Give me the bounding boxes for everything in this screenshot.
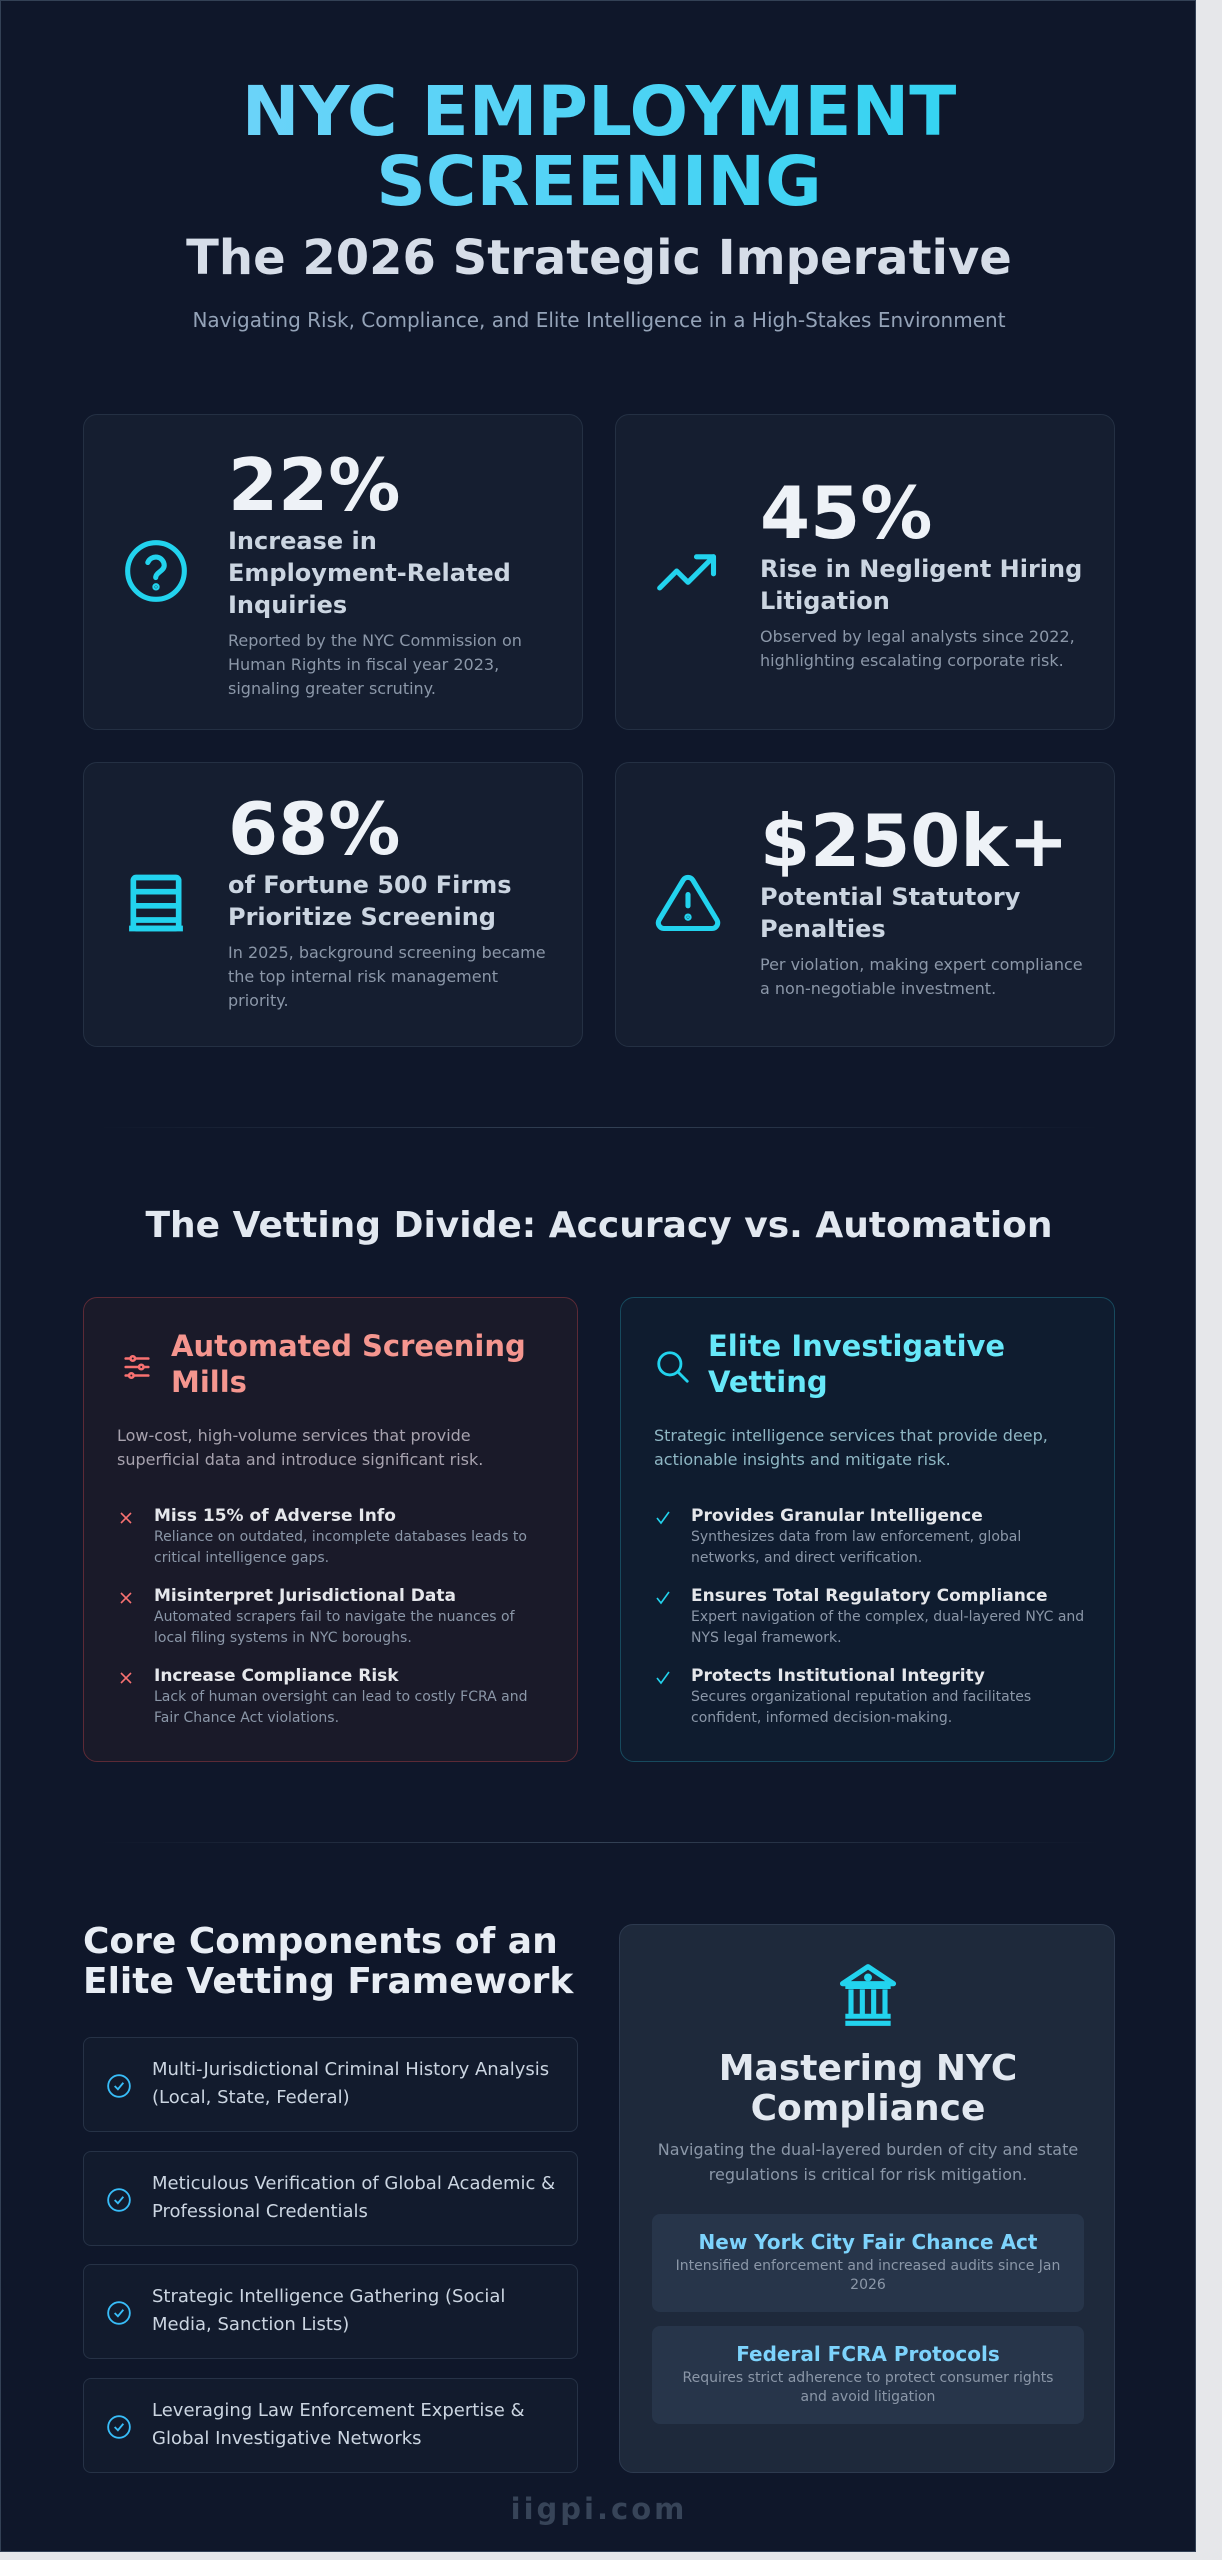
stat card: 22%: 22%: [228, 443, 400, 527]
description: regulations is critical for risk mitigation.: [709, 2165, 1027, 2184]
icon: warning: [656, 874, 720, 931]
stat card: $250k+: Penalties: [760, 915, 886, 943]
heading: Vetting: [708, 1365, 828, 1399]
icon: trend up: [657, 554, 716, 590]
component 2: Professional Credentials: [152, 2201, 368, 2222]
item: compliance risk: Lack of human oversight can lead to costly FCRA and: [154, 1689, 528, 1705]
stat card: 68%: of Fortune 500 Firms: [228, 871, 512, 899]
icon: server: [129, 874, 183, 932]
description: Low-cost, high-volume services that provide: [117, 1426, 471, 1445]
item: granular: Synthesizes data from law enforcement, global: [691, 1529, 1021, 1545]
heading: Automated Screening: [171, 1329, 526, 1363]
stat card: 45%: [615, 414, 1115, 730]
stat card: 68%: priority.: [228, 991, 289, 1010]
stat card: 45%: Observed by legal analysts since 2022,: [760, 627, 1075, 646]
sub-box: FCRA: Requires strict adherence to protect consumer rights and avoid litigation: [682, 2370, 1053, 2405]
item: misinterpret: Automated scrapers fail to navigate the nuances of: [154, 1609, 515, 1625]
item: miss 15%: Miss 15% of Adverse Info: [154, 1506, 396, 1526]
description: superficial data and introduce significant risk.: [117, 1450, 483, 1469]
heading: [708, 1329, 1005, 1399]
description: [117, 1426, 483, 1469]
stat card: $250k+: Per violation, making expert compliance: [760, 955, 1083, 974]
item: compliance: Ensures Total Regulatory Compliance: [691, 1586, 1048, 1606]
section heading: vetting divide: The Vetting Divide: Accuracy vs. Automation: [145, 1205, 1053, 1246]
item: granular: Provides Granular Intelligence: [691, 1506, 983, 1526]
description: actionable insights and mitigate risk.: [654, 1450, 951, 1469]
description: Strategic intelligence services that provide deep,: [654, 1426, 1048, 1445]
stat card: $250k+: [615, 762, 1115, 1047]
description: Navigating the dual-layered burden of city and state: [658, 2140, 1078, 2159]
heading: Mastering NYC: [719, 2048, 1017, 2089]
item: miss 15%: Reliance on outdated, incomplete databases leads to: [154, 1529, 527, 1545]
stat card: 22%: [83, 414, 583, 730]
stat card: $250k+: $250k+: [760, 799, 1069, 883]
stat card: 68%: Prioritize Screening: [228, 903, 496, 931]
tagline: Navigating Risk, Compliance, and Elite Intelligence in a High-Stakes Environment: [192, 308, 1006, 332]
item: compliance risk: Fair Chance Act violations.: [154, 1710, 339, 1726]
icon: landmark: [840, 1964, 896, 2026]
sub-box: fair chance act: [652, 2214, 1084, 2312]
item: compliance: [656, 1586, 1084, 1646]
sub-box: FCRA: Federal FCRA Protocols: [736, 2342, 1000, 2366]
item: integrity: Protects Institutional Integrity: [691, 1666, 985, 1686]
heading: core components: [83, 1921, 574, 2002]
stat card: 22%: signaling greater scrutiny.: [228, 679, 436, 698]
stat card: 22%: Human Rights in fiscal year 2023,: [228, 655, 499, 674]
item: compliance risk: [120, 1666, 528, 1726]
component 1: [83, 2037, 578, 2132]
component 1: (Local, State, Federal): [152, 2087, 350, 2108]
stat card: 22%: Reported by the NYC Commission on: [228, 631, 522, 650]
item: misinterpret: local filing systems in NYC boroughs.: [154, 1630, 412, 1646]
icon: search: [657, 1351, 689, 1383]
heading: Elite Investigative: [708, 1329, 1005, 1363]
panel: automated screening mills: [83, 1297, 578, 1762]
item: granular: networks, and direct verification.: [691, 1550, 922, 1566]
heading: [171, 1329, 526, 1399]
stat card: 68%: 68%: [228, 787, 400, 871]
item: integrity: Secures organizational reputation and facilitates: [691, 1689, 1031, 1705]
item: compliance: Expert navigation of the complex, dual-layered NYC and: [691, 1609, 1084, 1625]
heading: core components: Elite Vetting Framework: [83, 1961, 573, 2002]
sub-box: fair chance act: New York City Fair Chance Act: [699, 2230, 1037, 2254]
item: miss 15%: critical intelligence gaps.: [154, 1550, 329, 1566]
footer: iigpi.com: [511, 2492, 687, 2526]
item: integrity: [656, 1666, 1031, 1726]
component 2: [83, 2151, 578, 2246]
stat card: 68%: [83, 762, 583, 1047]
item: compliance: NYS legal framework.: [691, 1630, 842, 1646]
stat card: 22%: Inquiries: [228, 591, 347, 619]
stat card: $250k+: a non-negotiable investment.: [760, 979, 996, 998]
title: SCREENING: [376, 142, 822, 222]
item: compliance risk: Increase Compliance Risk: [154, 1666, 399, 1686]
heading: [719, 2048, 1017, 2129]
heading: Compliance: [751, 2088, 985, 2129]
panel: mastering NYC compliance: [619, 1924, 1115, 2473]
component 4: Leveraging Law Enforcement Expertise &: [152, 2400, 525, 2421]
heading: core components: Core Components of an: [83, 1921, 558, 1962]
stat card: 68%: In 2025, background screening became: [228, 943, 546, 962]
stat card: 45%: 45%: [760, 471, 932, 555]
item: misinterpret: [120, 1586, 515, 1646]
title: NYC EMPLOYMENT: [242, 72, 956, 152]
component 2: Meticulous Verification of Global Academic &: [152, 2173, 555, 2194]
component 4: Global Investigative Networks: [152, 2428, 422, 2449]
description: [654, 1426, 1048, 1469]
component 1: Multi-Jurisdictional Criminal History Analysis: [152, 2059, 549, 2080]
stat card: 45%: highlighting escalating corporate risk.: [760, 651, 1064, 670]
item: granular: [656, 1506, 1021, 1566]
item: miss 15%: [120, 1506, 527, 1566]
panel: elite investigative vetting: [620, 1297, 1115, 1762]
item: misinterpret: Misinterpret Jurisdictional Data: [154, 1586, 456, 1606]
component 3: Strategic Intelligence Gathering (Social: [152, 2286, 505, 2307]
item: integrity: confident, informed decision-making.: [691, 1710, 952, 1726]
component 3: Media, Sanction Lists): [152, 2314, 349, 2335]
title: [1, 77, 1197, 217]
component 4: [83, 2378, 578, 2473]
icon: sliders: [124, 1355, 150, 1379]
stat card: $250k+: Potential Statutory: [760, 883, 1020, 911]
heading: Mills: [171, 1365, 247, 1399]
subtitle: The 2026 Strategic Imperative: [186, 230, 1012, 286]
stat card: 68%: the top internal risk management: [228, 967, 498, 986]
component 3: [83, 2264, 578, 2359]
sub-box: FCRA: [652, 2326, 1084, 2424]
stat card: 22%: Employment-Related: [228, 559, 511, 587]
stat card: 22%: Increase in: [228, 527, 377, 555]
icon: question: [125, 540, 187, 602]
sub-box: fair chance act: Intensified enforcement and increased audits since Jan 2026: [676, 2258, 1060, 2293]
stat card: 45%: Rise in Negligent Hiring: [760, 555, 1082, 583]
description: [658, 2140, 1078, 2184]
stat card: 45%: Litigation: [760, 587, 890, 615]
